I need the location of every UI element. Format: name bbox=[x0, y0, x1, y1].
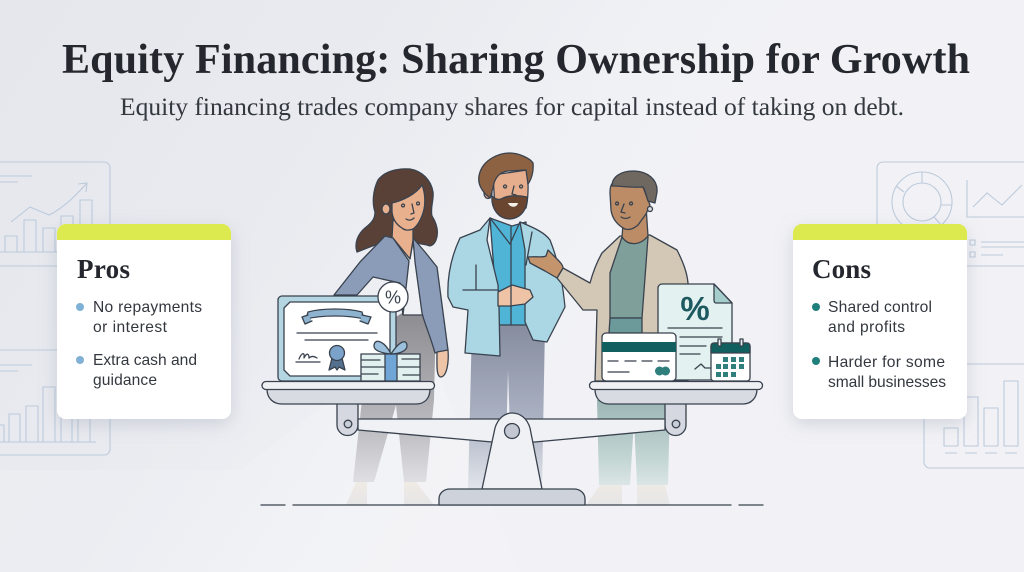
gift ribbon bbox=[385, 354, 397, 381]
background chart: bottom left dashboard bbox=[0, 350, 110, 455]
background chart: bottom right dashboard bbox=[924, 364, 1024, 468]
percent document: % bbox=[680, 290, 710, 327]
calendar rings bbox=[718, 339, 743, 346]
right bracket bbox=[665, 400, 686, 436]
right pin bbox=[672, 420, 680, 428]
man beard bbox=[492, 196, 527, 219]
cons item 1 bbox=[812, 299, 932, 336]
card logo bbox=[655, 366, 670, 376]
cons heading: Cons bbox=[812, 254, 871, 284]
document fold bbox=[714, 284, 732, 303]
fulcrum bbox=[482, 413, 542, 489]
left pan rim bbox=[262, 382, 434, 390]
certificate signature bbox=[299, 354, 317, 359]
ground line bbox=[261, 504, 763, 506]
card dashes bbox=[608, 361, 669, 372]
man trousers bbox=[468, 325, 545, 490]
third figure face bbox=[610, 183, 650, 230]
man jacket right bbox=[520, 222, 565, 342]
third figure neck bbox=[622, 206, 648, 244]
certificate sheet bbox=[284, 302, 390, 376]
beam bbox=[358, 419, 665, 442]
pros item 2: guidance bbox=[93, 372, 157, 389]
man jacket left bbox=[448, 218, 500, 356]
cons item 1: and profits bbox=[828, 319, 905, 336]
cons header band bbox=[793, 224, 967, 240]
man smile bbox=[508, 203, 518, 207]
pros item 1 bbox=[76, 299, 202, 336]
card stripe bbox=[602, 342, 676, 352]
cons item 2 bbox=[812, 354, 946, 391]
pros item 1: or interest bbox=[93, 319, 168, 336]
woman features bbox=[402, 202, 420, 220]
pros item 2 bbox=[76, 352, 197, 389]
woman blazer right bbox=[413, 238, 448, 353]
background chart: top right dashboard bbox=[877, 162, 1024, 266]
certificate ribbon tails bbox=[302, 315, 371, 324]
right pan bowl bbox=[595, 389, 757, 404]
left bracket bbox=[337, 400, 358, 436]
cons item 1: Shared control bbox=[828, 299, 932, 316]
third figure features bbox=[616, 202, 633, 218]
third figure cardigan bbox=[557, 235, 688, 381]
woman neck bbox=[392, 220, 413, 259]
gift of cash bbox=[361, 341, 420, 381]
percent badge: % bbox=[385, 288, 401, 308]
right pan rim bbox=[590, 382, 762, 390]
left pin bbox=[344, 420, 352, 428]
woman face bbox=[392, 185, 425, 230]
subtitle: Equity financing trades company shares for capital instead of taking on debt. bbox=[120, 92, 904, 121]
panel: pros bbox=[57, 224, 231, 419]
cons item 2: small businesses bbox=[828, 374, 946, 391]
gift bow bbox=[374, 341, 407, 354]
cash lines bbox=[362, 359, 420, 375]
man ear bbox=[484, 188, 492, 198]
man features bbox=[504, 185, 523, 195]
calendar grid bbox=[716, 357, 744, 377]
third figure lower top bbox=[609, 318, 642, 333]
calendar header bbox=[711, 343, 750, 353]
figure: woman with short hair bbox=[528, 171, 688, 505]
cons item 2: Harder for some bbox=[828, 354, 945, 371]
balance scale bbox=[261, 389, 763, 505]
third figure hand bbox=[528, 250, 563, 278]
percent document bbox=[658, 284, 732, 380]
third figure top bbox=[610, 237, 648, 318]
woman blouse bbox=[393, 238, 424, 315]
woman hair bbox=[356, 169, 437, 252]
man shirt bbox=[490, 218, 526, 325]
third figure trousers bbox=[597, 400, 670, 485]
woman trousers bbox=[353, 313, 436, 482]
man hair bbox=[479, 153, 533, 198]
pros header band bbox=[57, 224, 231, 240]
woman blazer left bbox=[334, 236, 409, 315]
certificate text lines bbox=[296, 333, 377, 362]
third figure earring bbox=[648, 206, 652, 212]
certificate seal bbox=[329, 346, 345, 370]
title: Equity Financing: Sharing Ownership for Growth bbox=[62, 37, 970, 83]
left pan bowl bbox=[267, 389, 430, 404]
third figure shoes bbox=[586, 485, 670, 505]
woman shoes bbox=[346, 482, 434, 505]
certificate bbox=[278, 296, 396, 381]
figure: woman investor bbox=[334, 169, 448, 505]
figure: man investor bbox=[448, 153, 565, 490]
scale base bbox=[439, 489, 585, 505]
woman ear bbox=[382, 204, 390, 214]
man lapel and shirt details bbox=[463, 218, 532, 325]
document lines bbox=[668, 328, 722, 369]
pros heading: Pros bbox=[77, 254, 130, 284]
pros item 1: No repayments bbox=[93, 299, 202, 316]
pros item 2: Extra cash and bbox=[93, 352, 197, 369]
credit card bbox=[602, 333, 676, 381]
certificate ribbon bbox=[306, 309, 364, 319]
man face bbox=[493, 170, 528, 218]
panel: cons bbox=[793, 224, 967, 419]
third figure hair bbox=[612, 171, 657, 203]
fulcrum pin bbox=[504, 424, 520, 438]
man hand bbox=[498, 285, 533, 306]
background chart: top left dashboard bbox=[0, 162, 110, 266]
woman hand bbox=[437, 350, 448, 377]
calendar bbox=[711, 339, 750, 381]
percent badge bbox=[378, 282, 408, 312]
